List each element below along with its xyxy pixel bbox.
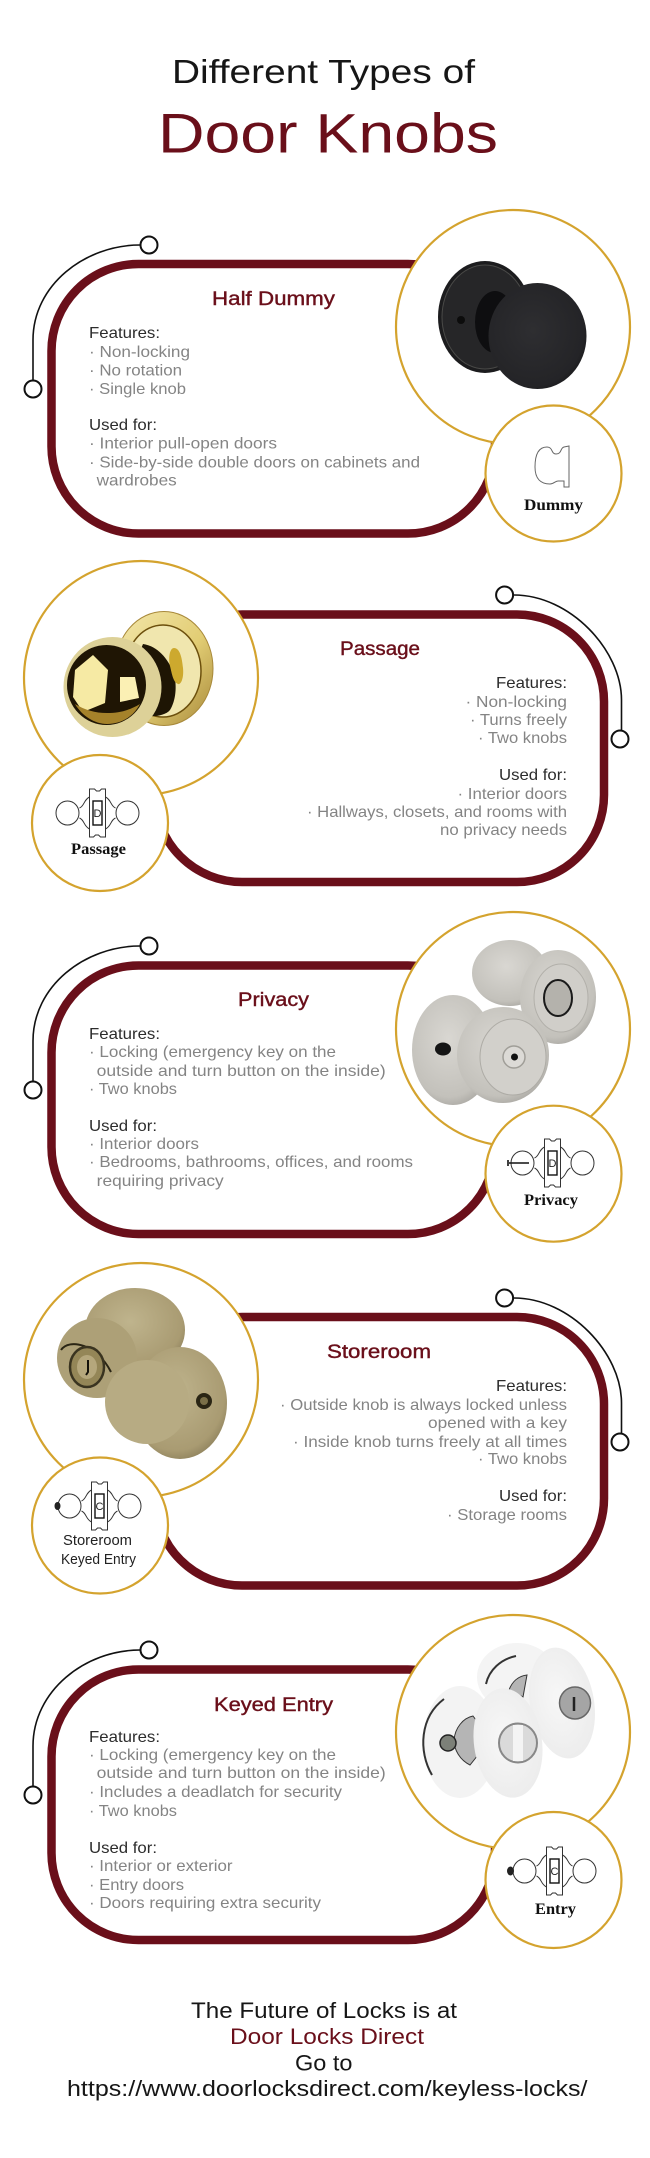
features text: · Single knob xyxy=(89,381,186,398)
features text: · Locking (emergency key on the xyxy=(89,1044,336,1061)
footer call to action: The Future of Locks is at xyxy=(191,1998,457,2023)
heading: Half Dummy xyxy=(212,289,336,310)
features text: Features: xyxy=(89,1729,160,1746)
features text xyxy=(280,1378,567,1468)
used for text: no privacy needs xyxy=(440,822,567,839)
features text xyxy=(466,675,567,747)
used for text: · Interior pull-open doors xyxy=(89,436,277,453)
used for text: Used for: xyxy=(499,767,567,784)
used for text: · Bedrooms, bathrooms, offices, and rooms xyxy=(89,1154,413,1171)
features text: outside and turn button on the inside) xyxy=(97,1063,386,1080)
panel: privacy xyxy=(24,912,630,1242)
features text: · Non-locking xyxy=(466,694,567,711)
used for text xyxy=(447,1488,567,1524)
used for text: Used for: xyxy=(89,1840,157,1857)
panel outline xyxy=(155,1317,604,1586)
features text xyxy=(89,1729,386,1820)
features text: Features: xyxy=(496,675,567,692)
features text: opened with a key xyxy=(428,1415,567,1432)
icon: dummy diagram xyxy=(524,446,583,514)
connector xyxy=(24,236,158,398)
photo circle xyxy=(396,912,630,1146)
footer call to action xyxy=(67,1998,588,2101)
heading: Privacy xyxy=(238,990,310,1011)
heading: Passage xyxy=(340,639,420,660)
panel: passage xyxy=(24,561,628,891)
icon: privacy diagram: D xyxy=(549,1158,557,1170)
photo circle xyxy=(24,1263,258,1497)
heading: Storeroom xyxy=(327,1342,431,1363)
panel: storeroom xyxy=(24,1263,628,1594)
icon: satin nickel knobs xyxy=(412,940,596,1105)
diagram circle xyxy=(486,406,622,542)
photo circle xyxy=(396,210,630,444)
photo circle xyxy=(24,561,258,795)
footer call to action: https://www.doorlocksdirect.com/keyless-locks/ xyxy=(67,2076,588,2101)
used for text: · Doors requiring extra security xyxy=(89,1895,321,1912)
used for text xyxy=(307,767,567,839)
connector xyxy=(496,1290,628,1450)
icon: privacy diagram: Privacy xyxy=(524,1192,578,1209)
icon: passage diagram xyxy=(56,789,139,858)
features text: · Includes a deadlatch for security xyxy=(89,1784,342,1801)
icon: chrome knobs xyxy=(423,1642,603,1802)
icon: entry diagram xyxy=(507,1847,596,1918)
features text xyxy=(89,1026,386,1098)
used for text: Used for: xyxy=(499,1488,567,1505)
title: Different Types of xyxy=(172,53,476,90)
icon: storeroom diagram: Keyed Entry xyxy=(61,1551,136,1568)
icon: privacy diagram xyxy=(508,1139,594,1209)
used for text: requiring privacy xyxy=(97,1173,224,1190)
title xyxy=(158,53,498,164)
features text xyxy=(89,325,190,398)
title: Door Knobs xyxy=(158,102,498,164)
icon: black knob xyxy=(438,261,586,389)
icon: antique brass knobs xyxy=(57,1288,227,1459)
used for text: · Interior or exterior xyxy=(89,1858,233,1875)
features text: · Two knobs xyxy=(89,1803,177,1820)
icon: storeroom diagram: C xyxy=(96,1501,104,1513)
icon: passage diagram: D xyxy=(94,808,102,820)
used for text: · Interior doors xyxy=(89,1136,199,1153)
used for text: Used for: xyxy=(89,1118,157,1135)
features text: · Two knobs xyxy=(478,1451,567,1468)
panel outline xyxy=(155,614,604,882)
diagram circle xyxy=(486,1812,622,1948)
heading: Keyed Entry xyxy=(214,1695,334,1716)
features text: · No rotation xyxy=(89,362,182,380)
icon: entry diagram: C xyxy=(551,1866,559,1878)
footer call to action: Go to xyxy=(295,2051,352,2076)
panel: keyed entry xyxy=(24,1615,630,1948)
used for text: · Side-by-side double doors on cabinets and xyxy=(89,454,420,471)
features text: · Non-locking xyxy=(89,344,190,361)
features text: · Outside knob is always locked unless xyxy=(280,1397,567,1414)
used for text xyxy=(89,417,420,490)
features text: Features: xyxy=(89,325,160,342)
photo circle xyxy=(396,1615,630,1849)
icon: brass knob xyxy=(64,612,213,737)
panel outline xyxy=(52,264,495,534)
connector xyxy=(24,938,158,1098)
icon: entry diagram: Entry xyxy=(535,1901,576,1918)
features text: · Two knobs xyxy=(478,730,567,747)
used for text: · Hallways, closets, and rooms with xyxy=(307,804,567,821)
icon: storeroom diagram: Storeroom xyxy=(63,1532,132,1549)
footer call to action: Door Locks Direct xyxy=(230,2024,424,2049)
used for text: · Storage rooms xyxy=(447,1507,567,1524)
features text: Features: xyxy=(496,1378,567,1395)
used for text xyxy=(89,1840,321,1912)
diagram circle xyxy=(486,1106,622,1242)
panel outline xyxy=(52,966,495,1234)
diagram circle xyxy=(32,755,168,891)
features text: Features: xyxy=(89,1026,160,1043)
panel outline xyxy=(52,1670,495,1940)
icon: passage diagram: Passage xyxy=(71,841,126,858)
used for text: · Entry doors xyxy=(89,1877,184,1894)
connector xyxy=(24,1642,158,1804)
used for text: wardrobes xyxy=(96,473,177,490)
features text: · Inside knob turns freely at all times xyxy=(293,1434,567,1451)
used for text: · Interior doors xyxy=(458,786,567,803)
features text: · Turns freely xyxy=(470,712,567,729)
features text: · Two knobs xyxy=(89,1081,177,1098)
icon: storeroom diagram xyxy=(54,1482,141,1568)
icon: dummy diagram: Dummy xyxy=(524,497,583,514)
diagram circle xyxy=(32,1458,168,1594)
features text: · Locking (emergency key on the xyxy=(89,1747,336,1764)
used for text xyxy=(89,1118,413,1190)
features text: outside and turn button on the inside) xyxy=(97,1765,386,1782)
connector xyxy=(496,586,628,748)
panel: half dummy xyxy=(24,210,630,542)
used for text: Used for: xyxy=(89,417,157,434)
